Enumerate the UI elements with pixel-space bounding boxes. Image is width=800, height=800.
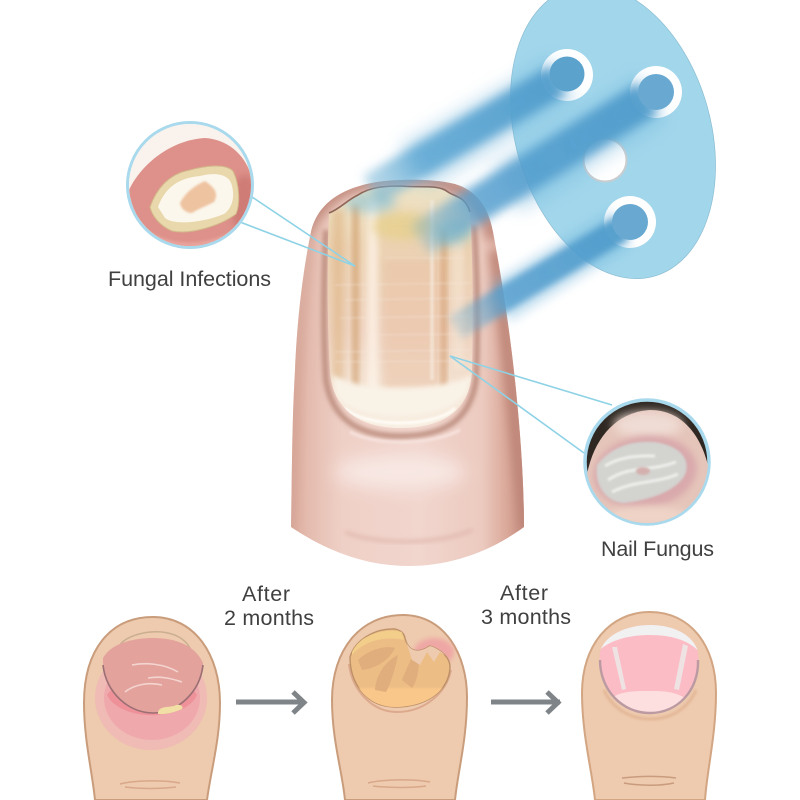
thumb: after 2 months, yellow nail bbox=[332, 615, 467, 800]
label: after 2 months: 2 months bbox=[224, 606, 314, 630]
label: after 3 months bbox=[481, 581, 571, 629]
finger bbox=[291, 180, 524, 566]
label: after 3 months: 3 months bbox=[481, 605, 571, 629]
callout lines: nail fungus bbox=[450, 356, 612, 453]
label: after 2 months: After bbox=[242, 582, 290, 606]
label: nail fungus: Nail Fungus bbox=[601, 537, 714, 561]
infected nail bbox=[328, 186, 473, 428]
callout lines: fungal infections bbox=[240, 195, 355, 266]
label: after 2 months bbox=[224, 582, 314, 630]
label: after 3 months: After bbox=[500, 581, 548, 605]
infographic: nail fungus laser treatment bbox=[83, 0, 717, 800]
aperture lenses bbox=[550, 56, 674, 240]
photo: nail fungus close-up bbox=[585, 400, 712, 530]
label: fungal infections: Fungal Infections bbox=[108, 267, 271, 291]
laser beams bbox=[363, 58, 664, 339]
arrow 1 bbox=[236, 692, 304, 713]
thumb: before treatment, inflamed nail bbox=[84, 617, 220, 800]
photo: fungal infection close-up bbox=[125, 120, 259, 250]
arrow 2 bbox=[491, 692, 560, 713]
laser disc with apertures bbox=[478, 0, 748, 303]
thumb: after 3 months, healthy nail bbox=[582, 612, 716, 800]
